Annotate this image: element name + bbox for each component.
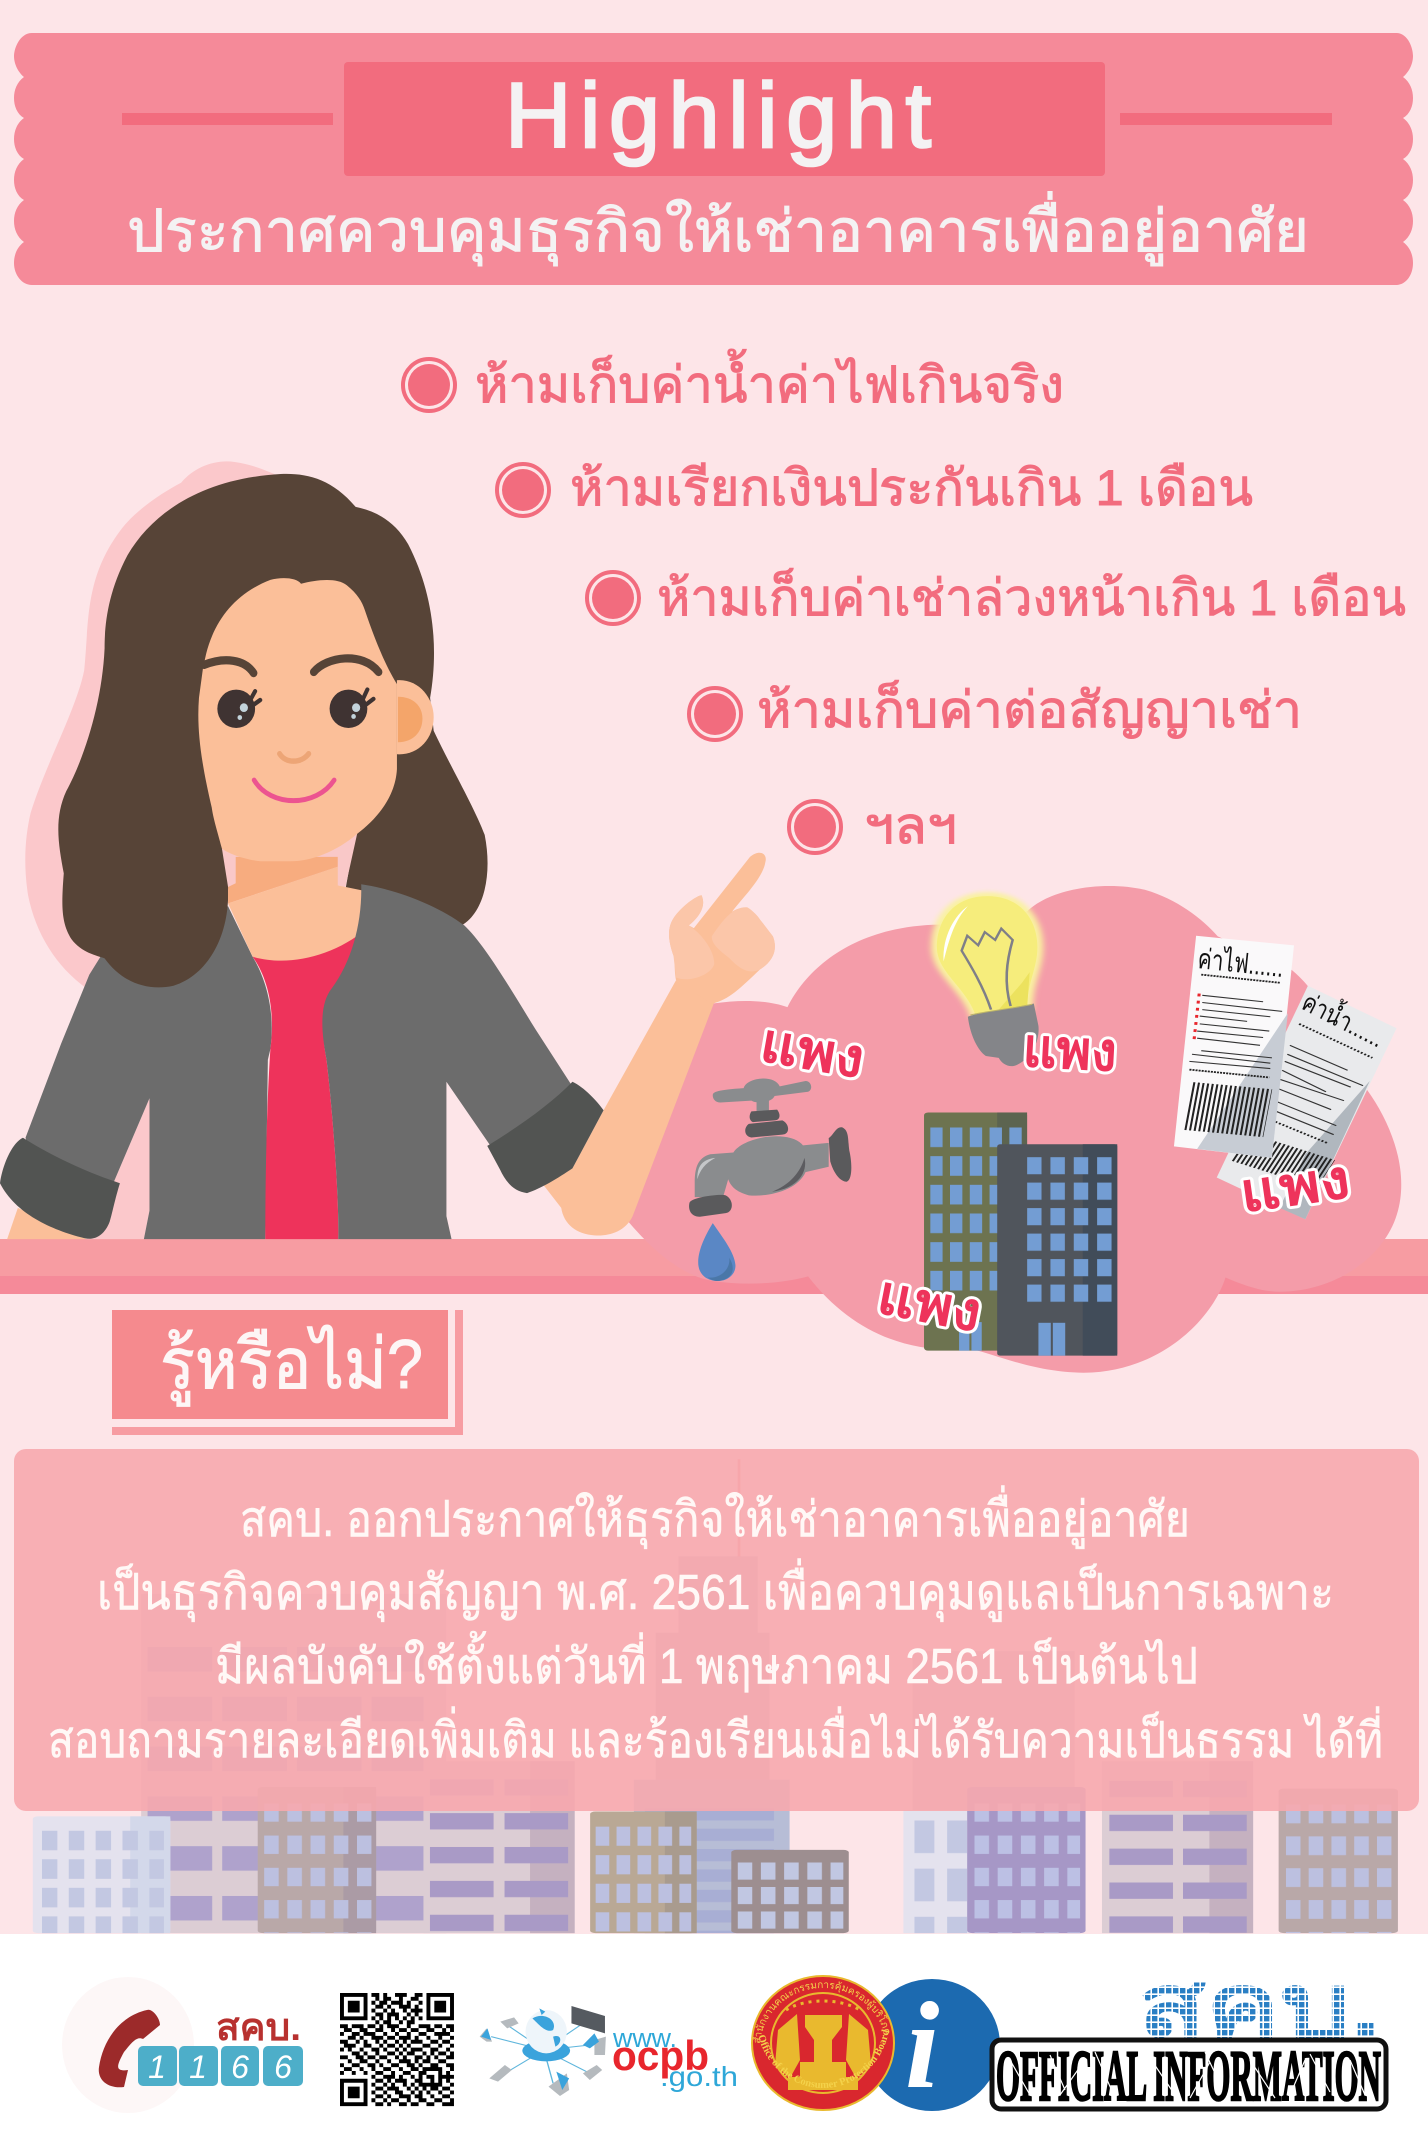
logo: consumer protection board seal: Office of the Consumer Protection Board (759, 2029, 888, 2088)
info text: มีผลบังคับใช้ตั้งแต่วันที่ 1 พฤษภาคม 2561 เป็นต้นไป (215, 1631, 1198, 1694)
heading: did you know: รู้หรือไม่? (160, 1325, 423, 1407)
logo: 1166 hotline: สคบ. (216, 2007, 301, 2049)
bill heading: electricity: ค่าไฟ...... (1196, 943, 1285, 983)
logo: 1166 hotline (62, 1977, 303, 2113)
illustrated cost items (689, 896, 1397, 1356)
tag: electricity expensive: แพง (1021, 1018, 1118, 1083)
tag: water expensive: แพง (756, 1013, 869, 1090)
info text (48, 1485, 1383, 1768)
left arm skin (7, 1208, 87, 1239)
expensive tags (756, 1013, 1354, 1344)
mouth (254, 780, 334, 801)
bullet 5: ฯลฯ (864, 798, 957, 854)
face (198, 578, 397, 861)
subtitle: ประกาศควบคุมธุรกิจให้เช่าอาคารเพื่ออยู่อาศัย (127, 191, 1309, 267)
cloud backdrop (620, 886, 1401, 1373)
right cuff (487, 1082, 604, 1193)
info text: เป็นธุรกิจควบคุมสัญญา พ.ศ. 2561 เพื่อควบคุมดูแลเป็นการเฉพาะ (97, 1558, 1334, 1622)
icon: blue info disc: i (905, 1977, 939, 2114)
eyebrows (204, 658, 379, 673)
icon: water drop (698, 1223, 735, 1281)
info panel (14, 1449, 1419, 1811)
bullet 5 (789, 798, 957, 854)
chest skin (228, 867, 372, 962)
bullet 1: ห้ามเก็บค่าน้ำค่าไฟเกินจริง (475, 349, 1064, 413)
character shadow (25, 461, 286, 989)
bullet 4: ห้ามเก็บค่าต่อสัญญาเช่า (757, 680, 1302, 738)
header banner (14, 33, 1413, 285)
QR code (340, 1993, 454, 2106)
character: woman pointing (0, 461, 775, 1239)
jacket right panel (322, 884, 577, 1239)
icon: buildings (924, 1112, 1117, 1356)
skyline background (33, 1459, 1398, 1933)
bullet 3: ห้ามเก็บค่าเช่าล่วงหน้าเกิน 1 เดือน (657, 568, 1406, 626)
logo: consumer protection board seal: สำนักงานคณะกรรมการคุ้มครองผู้บริโภค (752, 1982, 890, 2043)
hair (58, 474, 488, 987)
icon: blue info disc (864, 1977, 1000, 2114)
bill heading: water: ค่าน้ำ...... (1297, 983, 1391, 1053)
ear (397, 680, 434, 754)
red top (253, 928, 367, 1239)
left cuff (0, 1138, 120, 1239)
icon: electricity bill (1174, 936, 1294, 1158)
logo: ocpb website: ocpb (612, 2032, 709, 2079)
bullet 2: ห้ามเรียกเงินประกันเกิน 1 เดือน (570, 460, 1253, 516)
logo: 1166 hotline: 1 (148, 2049, 166, 2085)
logo: 1166 hotline: 6 (231, 2049, 249, 2085)
logo: 1166 hotline: 6 (274, 2049, 292, 2085)
nose (280, 754, 309, 761)
bullet list of prohibitions (403, 349, 1406, 854)
eyes (217, 690, 373, 728)
jacket left panel (26, 906, 272, 1239)
hand (669, 853, 775, 1004)
network icon (480, 2006, 606, 2096)
logo: ocpb website: .go.th (660, 2061, 738, 2092)
logo: 1166 hotline: 1 (189, 2049, 207, 2085)
heading: did you know (112, 1310, 459, 1431)
tag: bills expensive: แพง (1236, 1149, 1354, 1224)
neck (222, 834, 357, 887)
info text: สคบ. ออกประกาศให้ธุรกิจให้เช่าอาคารเพื่ออยู่อาศัย (240, 1485, 1190, 1549)
logo: consumer protection board seal (751, 1975, 895, 2111)
counter band (0, 1239, 1428, 1294)
right arm (543, 980, 714, 1235)
title: Highlight: Highlight (505, 65, 931, 167)
logo: dotted OCPB wordmark: สคบ. (1138, 1956, 1381, 2055)
tag: building expensive: แพง (873, 1265, 986, 1344)
icon: water bill (1217, 986, 1397, 1219)
logo: ocpb website (480, 2006, 738, 2096)
logo: ocpb website: www. (612, 2023, 677, 2053)
footer (0, 1934, 1428, 2142)
icon: light bulb (937, 896, 1039, 1066)
icon: water tap (689, 1078, 851, 1217)
